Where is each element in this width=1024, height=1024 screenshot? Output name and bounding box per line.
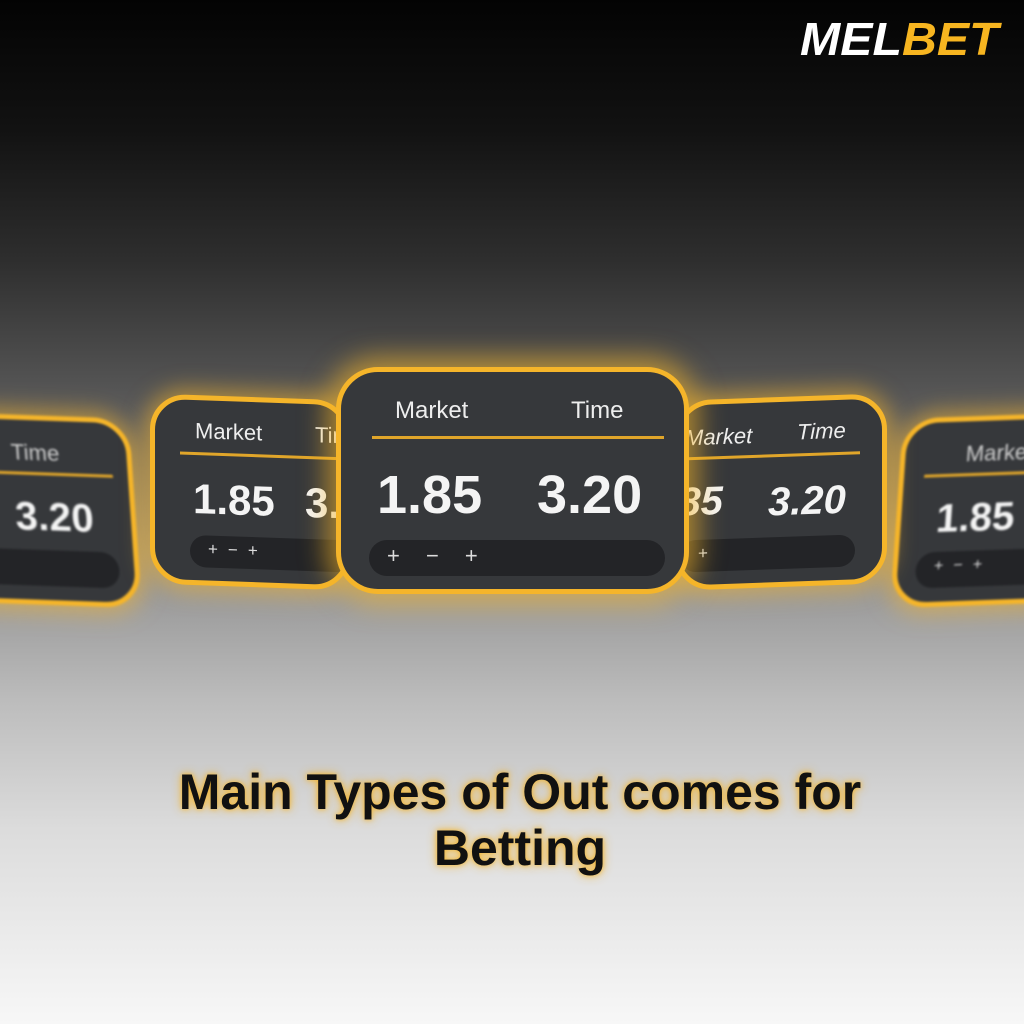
card: far left: [0, 412, 142, 608]
card: far right: 1.85: [935, 494, 1016, 541]
card: far left: Time: [10, 439, 60, 466]
card: far left: 3.20: [14, 494, 95, 541]
card: left: [150, 394, 350, 590]
card: far right: [890, 412, 1024, 608]
title: Betting: [434, 820, 606, 876]
card: center: 3.20: [537, 465, 642, 525]
card: center: [336, 367, 689, 594]
card: right: Time: [797, 418, 846, 444]
card: right: +: [698, 543, 718, 563]
card: right: Market: [685, 423, 752, 450]
card: right: [675, 393, 887, 591]
card: center: + − +: [387, 543, 488, 568]
card: center: Market: [395, 397, 468, 424]
card: far right: +−+: [933, 556, 993, 575]
card: left: +−+: [208, 540, 268, 561]
title: Main Types of Out comes for: [179, 764, 861, 820]
card: center: Time: [571, 397, 623, 424]
card: left: 1.85: [193, 475, 275, 525]
title: [174, 764, 866, 883]
card: right: 3.20: [768, 478, 846, 524]
logo: MELBET: [800, 13, 999, 65]
card: left: Market: [195, 418, 262, 445]
card: center: 1.85: [377, 465, 482, 525]
